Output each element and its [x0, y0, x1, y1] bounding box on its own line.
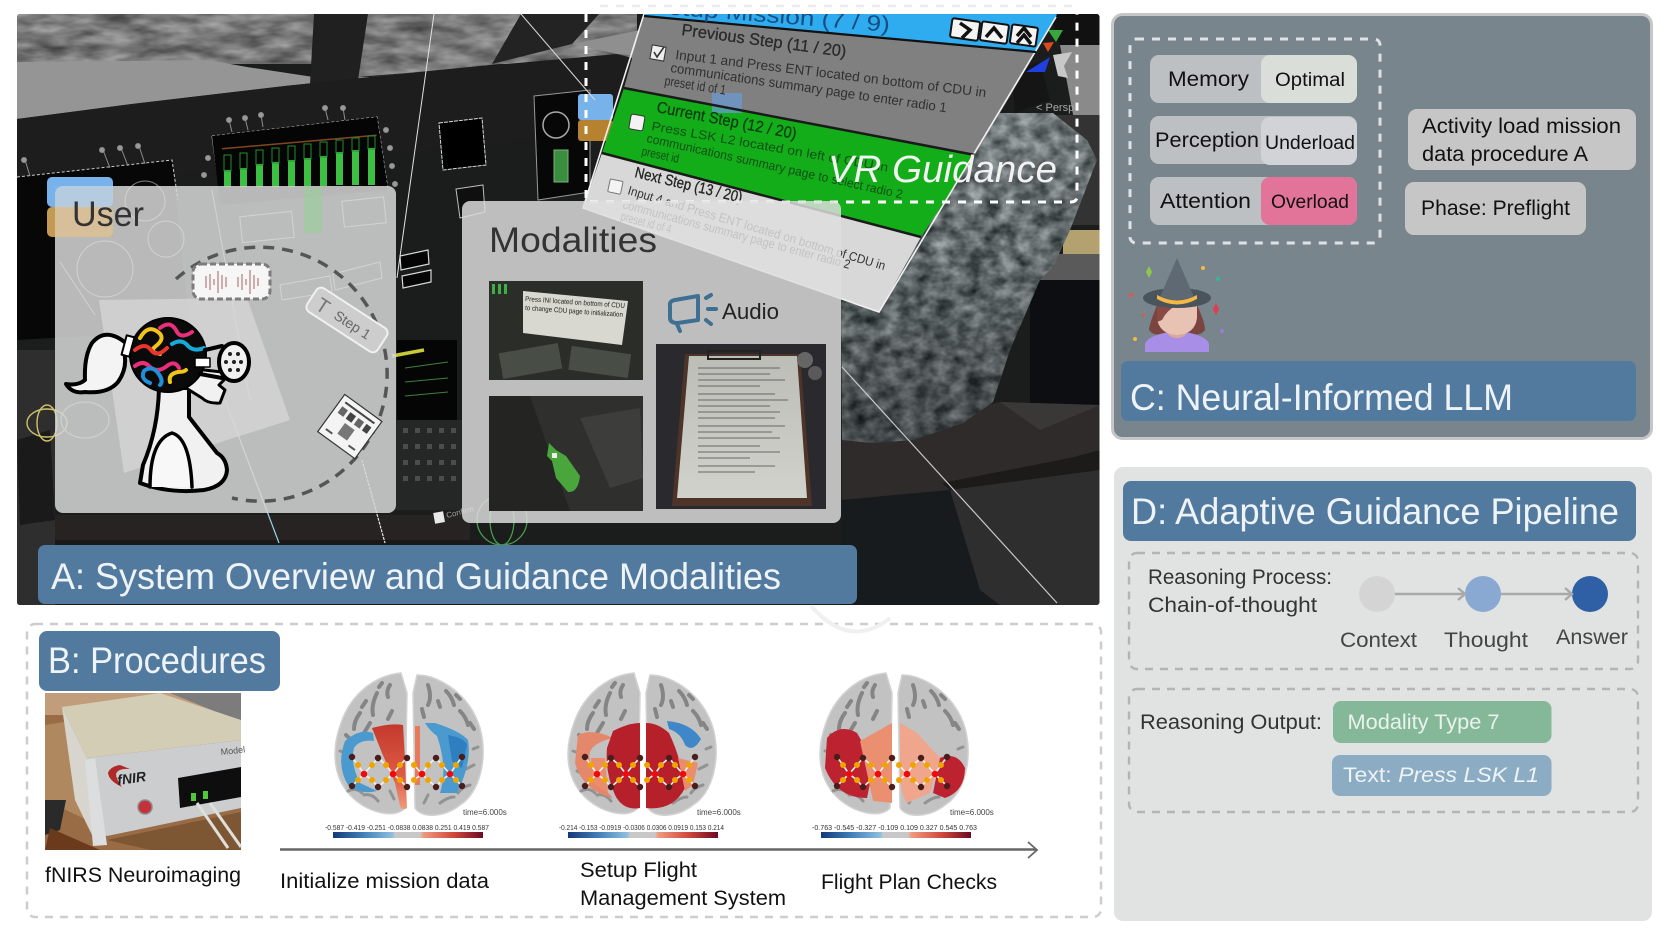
- dashed box: reasoning output: [1129, 689, 1638, 812]
- VR checklist window: preset id of 1: [664, 73, 727, 98]
- colour bar 3: time=6.000s: [950, 808, 994, 817]
- panel: user: [47, 177, 396, 513]
- phase label: [1405, 182, 1586, 235]
- icon: checklist document: [318, 394, 382, 459]
- thumbnail: highlighted control: [489, 396, 643, 511]
- photo: fNIRS device: fNIR: [116, 768, 148, 788]
- VR checklist window: Next Step (13 / 20): [633, 164, 744, 207]
- cockpit scene background: [17, 0, 1100, 605]
- VR checklist window: preset id of 4: [619, 209, 673, 236]
- VR Guidance dashed callout: [586, 6, 1077, 202]
- right background: windows and cabin: [841, 14, 1100, 605]
- title bar D: [1123, 481, 1636, 541]
- VR checklist window: Press LSK L2 located on left of CDU in: [650, 119, 889, 175]
- modality type chip: Modality Type 7: [1348, 711, 1500, 734]
- chain-of-thought diagram: Context: [1340, 629, 1417, 652]
- step label: flight plan checks: Flight Plan Checks: [821, 871, 997, 894]
- modalities label: Modalities: [489, 221, 657, 260]
- VR checklist window: preset id: [640, 144, 680, 166]
- audio label: Audio: [722, 299, 779, 324]
- photo: fNIRS device: [45, 693, 246, 850]
- chain-of-thought diagram: [1340, 576, 1628, 652]
- icon: text step tag: [304, 285, 390, 355]
- head and gizmo: < Persp: [1036, 102, 1074, 114]
- brain map: initialize mission data: [335, 673, 483, 815]
- dashed box: reasoning process: [1129, 553, 1638, 669]
- arrow: procedure timeline: [280, 842, 1037, 858]
- colour bar 1: time=6.000s: [463, 808, 507, 817]
- icon: witch LLM avatar: [1129, 258, 1224, 352]
- VR checklist window: communications summary page to enter radio 2: [621, 197, 852, 272]
- reasoning process label: Chain-of-thought: [1148, 594, 1317, 617]
- title bar C: [1121, 361, 1636, 421]
- VR checklist window: [583, 0, 1058, 312]
- reasoning process label: Reasoning Process:: [1148, 566, 1332, 589]
- VR checklist window: communications summary page to enter radio 1: [670, 60, 948, 115]
- VR checklist window: Previous Step (11 / 20): [680, 21, 847, 61]
- icon: audio speaker: [670, 295, 716, 331]
- VR checklist window: Input 4 and Press ENT located on bottom of CDU in: [626, 183, 887, 273]
- VR checklist window: Input 1 and Press ENT located on bottom of CDU in: [675, 47, 987, 100]
- head and gizmo: [1026, 30, 1074, 114]
- step label: setup flight management system: Setup Flight: [580, 859, 697, 882]
- text guidance chip: Text: Press LSK L1: [1343, 764, 1539, 787]
- colour bar 3: [812, 808, 994, 838]
- VR checklist window: Current Step (12 / 20): [655, 99, 798, 143]
- colour bar 3: -0.763 -0.545 -0.327 -0.109 0.109 0.327 0.545 0.763: [812, 825, 977, 832]
- reasoning output label: Reasoning Output:: [1140, 711, 1322, 734]
- cockpit scene background: Confirm: [445, 504, 475, 520]
- icon: user with brain and VR headset: [66, 318, 249, 491]
- brain map: flight plan checks: [820, 673, 968, 815]
- dashed state box: [1130, 39, 1380, 243]
- panel: modalities: [462, 201, 841, 523]
- step label: setup flight management system: [580, 859, 786, 910]
- activity label: Activity load mission: [1422, 115, 1621, 138]
- thumbnail: text card in cockpit: Press INI located on bottom of CDU: [525, 296, 625, 310]
- VR Guidance dashed callout: VR Guidance: [828, 149, 1057, 191]
- title bar D: D: Adaptive Guidance Pipeline: [1131, 491, 1619, 532]
- thumbnail: text card in cockpit: [489, 281, 643, 380]
- chain-of-thought diagram: Thought: [1444, 629, 1528, 652]
- modality type chip: [1333, 701, 1552, 743]
- colour bar 2: [559, 808, 741, 838]
- panel D: adaptive guidance pipeline: [1114, 467, 1652, 921]
- memory state pill: Memory: [1168, 68, 1250, 91]
- memory state pill: Optimal: [1275, 70, 1345, 91]
- title bar B: B: Procedures: [48, 640, 266, 681]
- dashed interaction loop: [176, 247, 387, 501]
- VR checklist window: communications summary page to select radio 2: [645, 131, 904, 202]
- text guidance chip: [1332, 755, 1552, 796]
- colour bar 2: -0.214 -0.153 -0.0919 -0.0306 0.0306 0.0919 0.153 0.214: [559, 825, 724, 832]
- soldier with camouflage: [841, 113, 1097, 443]
- title bar B: [39, 631, 280, 691]
- colour bar 1: -0.587 -0.419 -0.251 -0.0838 0.0838 0.251 0.419 0.587: [325, 825, 489, 832]
- panel A: system overview: [17, 0, 1100, 605]
- background instruments through panel: [47, 177, 113, 237]
- perception state pill: Underload: [1265, 133, 1355, 154]
- perception state pill: Perception: [1155, 129, 1259, 152]
- faint curved arrow: [811, 606, 890, 631]
- brain map: setup flight management: [568, 673, 716, 815]
- thumbnail: text card in cockpit: to change CDU page to initialization: [525, 305, 623, 319]
- colour bar 2: time=6.000s: [697, 808, 741, 817]
- colour bar 1: [325, 808, 507, 838]
- title bar A: A: System Overview and Guidance Modalities: [51, 556, 781, 597]
- icon: audio waveform tag: [193, 264, 270, 299]
- step label: setup flight management system: Management System: [580, 887, 786, 910]
- user label: User: [72, 195, 144, 234]
- icon: text step tag: Step 1: [331, 307, 374, 343]
- panel C: neural-informed LLM: [1112, 14, 1652, 438]
- fNIRS label: fNIRS Neuroimaging: [45, 864, 241, 887]
- activity label: data procedure A: [1422, 143, 1588, 166]
- activity label: [1408, 109, 1636, 170]
- perception state pill: [1150, 116, 1357, 165]
- memory state pill: [1150, 55, 1357, 103]
- panel B: procedures: [27, 606, 1101, 917]
- title bar C: C: Neural-Informed LLM: [1130, 377, 1513, 418]
- icon: text step tag: T: [311, 294, 334, 319]
- step label: initialize: Initialize mission data: [280, 870, 489, 893]
- title bar A: [38, 545, 857, 604]
- attention state pill: Attention: [1160, 190, 1251, 213]
- attention state pill: [1150, 177, 1357, 225]
- thumbnail: paper checklist on clipboard: [656, 344, 826, 509]
- attention state pill: Overload: [1271, 192, 1349, 213]
- reasoning process label: [1148, 566, 1332, 617]
- photo: fNIRS device: Model: [220, 744, 246, 757]
- chain-of-thought diagram: Answer: [1556, 626, 1628, 649]
- phase label: Phase: Preflight: [1421, 197, 1570, 220]
